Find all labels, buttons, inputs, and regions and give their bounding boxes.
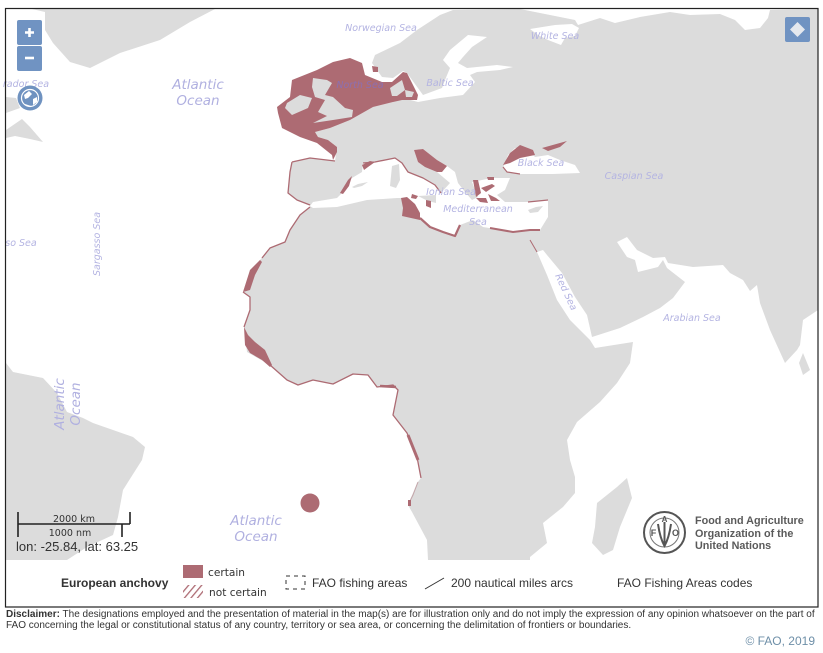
- label: Baltic Sea: Baltic Sea: [426, 78, 474, 89]
- Mediterranean islands: [352, 164, 543, 213]
- logo emblem: [644, 512, 685, 553]
- label: Red Sea: Red Sea: [552, 272, 579, 312]
- logo emblem: O: [672, 528, 679, 538]
- range: North-east Atlantic shelf: [277, 58, 418, 160]
- disclaimer: The designations employed and the presentation of material in the map(s) are for illustration only and do not imply the expression of any opinion whatsoever on the part of: [60, 609, 815, 620]
- label: North Sea: North Sea: [336, 80, 384, 91]
- sea: Black Sea: [503, 148, 580, 174]
- FAO logo: [644, 512, 804, 553]
- land: Sri Lanka: [799, 353, 810, 375]
- label: Norwegian Sea: Norwegian Sea: [345, 23, 417, 34]
- label: Black Sea: Black Sea: [518, 158, 564, 169]
- legend label: codes: FAO Fishing Areas codes: [617, 576, 752, 590]
- legend title: European anchovy: [61, 576, 169, 590]
- label: Labrador Sea: rador Sea: [3, 79, 49, 90]
- label: Atlantic Ocean north: Atlantic: [171, 77, 224, 93]
- range: isolated seamount: [300, 494, 320, 512]
- label: Sargasso Sea fragment: so Sea: [5, 238, 37, 249]
- scale label nm: 1000 nm: [49, 528, 91, 539]
- icon: layers diamond button: [785, 17, 810, 42]
- logo emblem: F: [651, 528, 657, 538]
- British Isles and Denmark land: [285, 78, 414, 123]
- label: Sargasso Sea: Sargasso Sea: [92, 212, 103, 276]
- range: Gulf of Lion and Spain: [340, 161, 375, 194]
- logo text: Food and Agriculture: [695, 515, 804, 527]
- label: Ocean west: Ocean: [68, 382, 84, 426]
- cover below map: [6, 560, 818, 607]
- range: thin coastal strips: [243, 158, 548, 503]
- legend swatch: not certain: [183, 585, 203, 598]
- legend swatch: certain: [183, 565, 203, 578]
- zoom in button: [17, 20, 42, 45]
- legend label: not certain: not certain: [209, 587, 267, 599]
- species range: certain (maroon): [243, 58, 567, 512]
- label: Atlantic Ocean south: Atlantic: [229, 513, 282, 529]
- label: Atlantic Ocean west: Atlantic: [52, 378, 68, 431]
- copyright: © FAO, 2019: [745, 634, 815, 648]
- range: Black Sea north-west: [503, 141, 567, 165]
- sea: White Sea: [530, 24, 579, 45]
- logo text: United Nations: [695, 540, 771, 552]
- scale bar: [18, 512, 130, 539]
- label: Ocean south: Ocean: [234, 529, 278, 545]
- sea: Mediterranean: [310, 149, 548, 236]
- coordinates readout: lon: -25.84, lat: 63.25: [16, 539, 138, 554]
- land: South America: [6, 363, 145, 560]
- icon: globe button: [18, 86, 42, 110]
- legend: [61, 565, 752, 599]
- land: Newfoundland and Labrador: [6, 97, 43, 142]
- legend label: FAO fishing areas: FAO fishing areas: [312, 576, 407, 590]
- range: Gulf of Gabes: [401, 194, 431, 220]
- land: Madagascar: [592, 478, 632, 555]
- range: Aegean Sea: [473, 177, 500, 203]
- zoom out button: [17, 46, 42, 71]
- range: Western Sahara coast: [243, 260, 262, 292]
- label: White Sea: White Sea: [531, 31, 579, 42]
- range: Senegal and Guinea coast: [244, 327, 272, 367]
- logo emblem: A: [662, 515, 668, 524]
- label: Ionian Sea: Ionian Sea: [426, 187, 476, 198]
- land: Greenland: [32, 9, 215, 68]
- legend swatch: FAO fishing areas: [286, 576, 305, 589]
- scale label km: 2000 km: [53, 514, 95, 525]
- range: Adriatic Sea: [414, 149, 447, 172]
- land: Eurasia and Africa: [243, 9, 818, 560]
- logo text: Organization of the: [695, 528, 793, 540]
- label: Caspian Sea: Caspian Sea: [605, 171, 663, 182]
- label: Ocean north: Ocean: [176, 93, 220, 109]
- label: Arabian Sea: Arabian Sea: [662, 313, 721, 324]
- disclaimer: FAO concerning the legal or constitutional status of any country, territory or sea area, or concerning the delimitation of frontiers or boundaries.: [6, 620, 631, 631]
- sea labels: [3, 23, 721, 545]
- range: Skagerrak patch: [372, 66, 378, 72]
- legend label: certain: certain: [208, 567, 245, 579]
- legend label: arcs: 200 nautical miles arcs: [451, 576, 573, 590]
- label: Sea under Mediterranean: Sea: [469, 217, 487, 228]
- legend swatch: arcs: [425, 578, 444, 589]
- disclaimer: Disclaimer:: [6, 609, 60, 620]
- label: Mediterranean: Mediterranean: [443, 204, 513, 215]
